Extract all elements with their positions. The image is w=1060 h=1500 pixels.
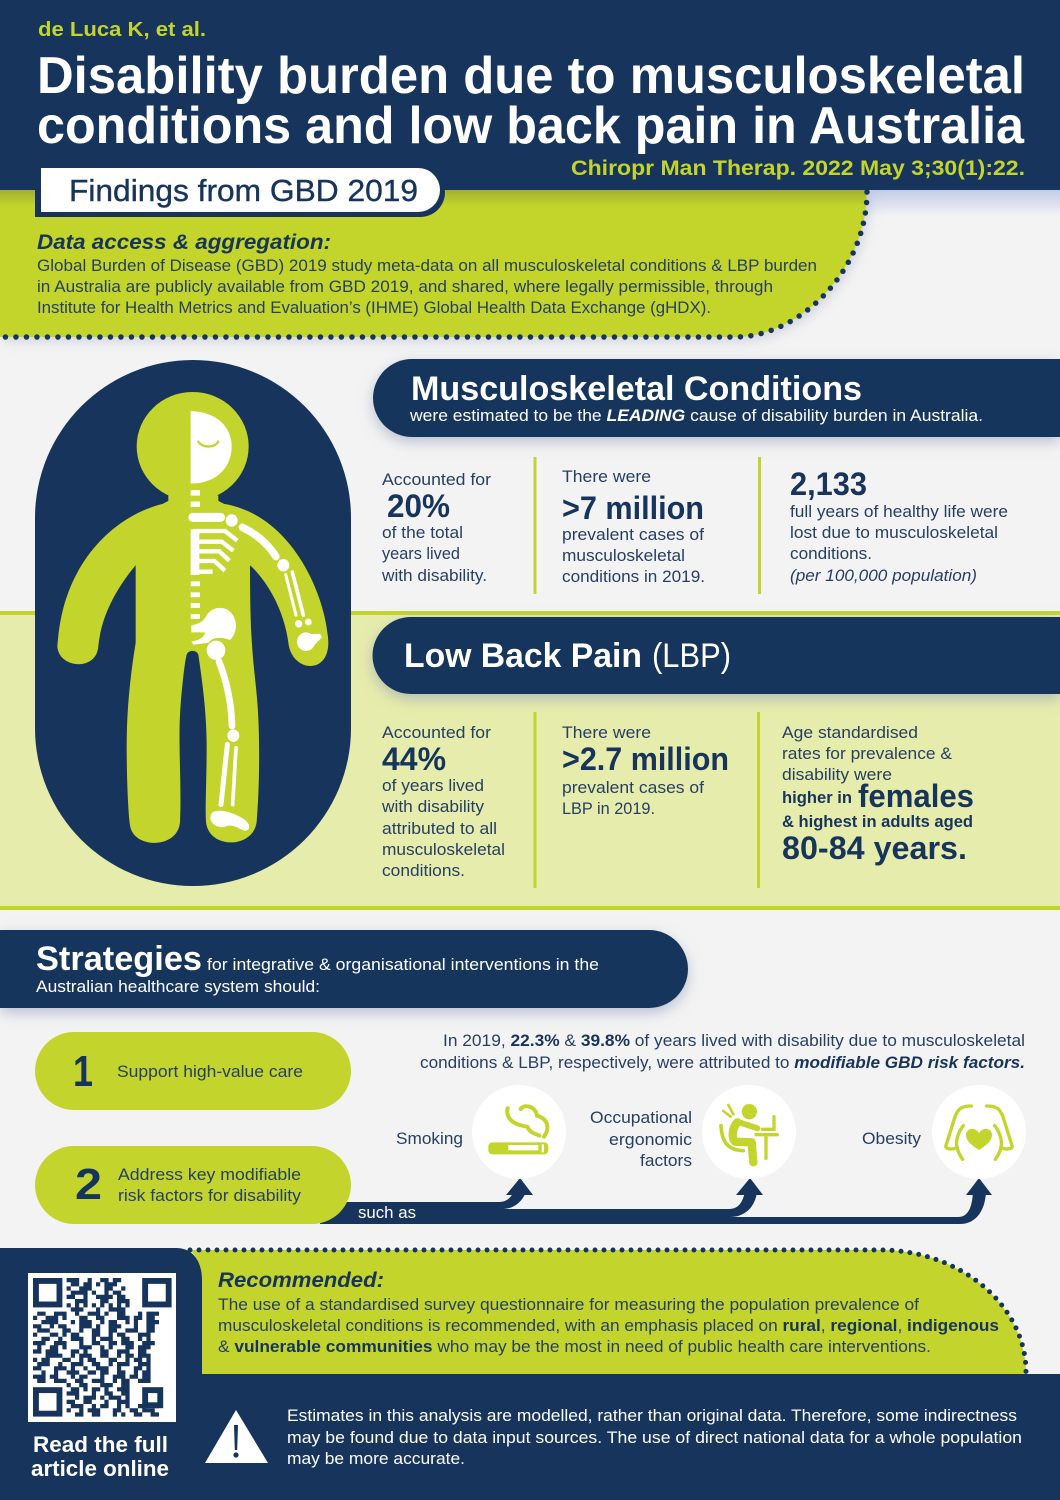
strategy 1: 1 <box>73 1047 93 1096</box>
stat: 7 million: prevalent cases of <box>562 525 704 544</box>
stat: 2,133 years: conditions. <box>790 544 872 563</box>
stat: age standardised rates: Age standardised <box>782 723 918 742</box>
stat: 7 million <box>562 467 705 586</box>
strategy 2: Address key modifiable <box>118 1165 301 1184</box>
stat: 20 percent: of the total <box>382 523 463 542</box>
text: recommended body <box>218 1295 999 1356</box>
rib cage <box>191 529 237 575</box>
heading bar: musculoskeletal conditions: Musculoskeletal Conditions <box>411 370 862 408</box>
heading bar: strategies: for integrative & organisational interventions in the <box>207 955 599 974</box>
stat: 2.7 million: prevalent cases of <box>562 778 704 797</box>
stat: 2,133 years: full years of healthy life were <box>790 502 1008 521</box>
stat: 20 percent: years lived <box>382 544 460 563</box>
heading: data access: Data access & aggregation: <box>37 231 331 254</box>
text: data access body: Global Burden of Disease (GBD) 2019 study meta-data on all musculoskeletal conditions & LBP burden <box>37 256 817 275</box>
skeleton bones <box>188 411 322 831</box>
figure body <box>57 495 328 843</box>
read the full article label: article online <box>31 1456 169 1481</box>
title: Disability burden due to musculoskeletal <box>37 47 1025 105</box>
title: conditions and low back pain in Australia <box>37 97 1025 155</box>
title <box>37 47 1025 155</box>
risk factor: obesity <box>862 1085 1026 1179</box>
stat: 44 percent: attributed to all <box>382 819 497 838</box>
stat: 44 percent <box>381 723 505 880</box>
stat: 20 percent: with disability. <box>381 566 487 585</box>
stat: 2.7 million <box>562 723 729 818</box>
stat: age standardised rates: rates for prevalence & <box>782 744 953 763</box>
strategy 1 <box>35 1032 351 1110</box>
stat: 20 percent: 20% <box>387 488 450 524</box>
panel: recommended <box>190 1250 1026 1374</box>
stat: 2.7 million: There were <box>562 723 651 742</box>
stat: 44 percent: conditions. <box>382 861 465 880</box>
strategy 2 <box>35 1146 351 1224</box>
text: caveat: may be more accurate. <box>287 1449 465 1468</box>
stat: age standardised rates: females <box>858 778 974 814</box>
text: data access body: Institute for Health Metrics and Evaluation’s (IHME) Global Health Data Exchange (gHDX). <box>37 298 711 317</box>
strategy 1: Support high-value care <box>117 1062 303 1081</box>
stat: 7 million: musculoskeletal <box>562 546 685 565</box>
stat: 2,133 years: lost due to musculoskeletal <box>790 523 998 542</box>
risk factor: occupational ergonomic factors: Occupational <box>590 1108 692 1127</box>
panel: data access <box>0 190 867 337</box>
risk factor: occupational ergonomic factors: ergonomic <box>609 1130 693 1149</box>
stat: 7 million: >7 million <box>562 490 704 526</box>
citation: Chiropr Man Therap. 2022 May 3;30(1):22. <box>571 157 1025 180</box>
figure head <box>137 392 249 501</box>
stat: 44 percent: musculoskeletal <box>382 840 505 859</box>
stat: age standardised rates: disability were <box>782 765 892 784</box>
heading bar: musculoskeletal conditions <box>373 359 1060 437</box>
heading bar: low back pain <box>372 617 1060 694</box>
stat: 44 percent: with disability <box>381 797 485 816</box>
strategy 2: 2 <box>75 1160 102 1209</box>
text: recommended body: The use of a standardised survey questionnaire for measuring the population prevalence of <box>218 1295 919 1314</box>
heading bar: musculoskeletal conditions: were estimated to be the LEADING cause of disability burden in Australia. <box>409 406 983 425</box>
read the full article label: Read the full <box>33 1432 168 1457</box>
icon: warning triangle <box>205 1410 268 1463</box>
stat: 2.7 million: LBP in 2019. <box>562 799 655 818</box>
risk factor: obesity: Obesity <box>862 1129 922 1148</box>
stat: 7 million: conditions in 2019. <box>562 567 705 586</box>
stat: 2,133 years <box>790 466 1008 585</box>
header band <box>0 0 1060 190</box>
text: data access body: in Australia are publicly available from GBD 2019, and shared, where legally permissible, through <box>37 277 773 296</box>
text: modifiable risk factors: conditions & LBP, respectively, were attributed to modifiable GBD risk factors. <box>420 1053 1025 1072</box>
stat: 20 percent <box>381 470 491 585</box>
stat: age standardised rates: 80-84 years. <box>782 830 967 866</box>
stat: age standardised rates: & highest in adults aged <box>782 812 973 831</box>
risk factor: smoking: Smoking <box>396 1129 463 1148</box>
such as label: such as <box>358 1203 416 1222</box>
read the full article label <box>31 1432 169 1481</box>
risk factor: smoking <box>396 1085 566 1179</box>
text: caveat: may be found due to data input sources. The use of direct national data for a whole population <box>287 1428 1022 1447</box>
heading bar: low back pain: Low Back Pain <box>404 637 642 675</box>
stat: 2.7 million: >2.7 million <box>562 741 729 777</box>
stat: 44 percent: of years lived <box>382 776 484 795</box>
stat: 7 million: There were <box>562 467 651 486</box>
stat: 44 percent: 44% <box>382 741 446 777</box>
stat: 2,133 years: 2,133 <box>790 466 867 502</box>
findings tab <box>35 168 445 217</box>
footer navy shape <box>0 1248 1060 1500</box>
stat: age standardised rates: higher in <box>782 788 852 807</box>
stat: 44 percent: Accounted for <box>382 723 491 742</box>
QR code <box>28 1273 176 1422</box>
text: modifiable risk factors: In 2019, 22.3% & 39.8% of years lived with disability due to musculoskeletal <box>443 1031 1025 1050</box>
heading bar: strategies: Strategies <box>36 940 202 978</box>
stat: age standardised rates <box>782 723 974 866</box>
risk factor: occupational ergonomic factors: factors <box>640 1151 692 1170</box>
findings tab: Findings from GBD 2019 <box>69 173 418 208</box>
pale green LBP band <box>0 611 1060 910</box>
risk factor: occupational ergonomic factors <box>590 1085 796 1179</box>
heading bar: strategies: Australian healthcare system should: <box>36 977 320 996</box>
text: caveat: Estimates in this analysis are modelled, rather than original data. Therefore, some indirectness <box>287 1406 1017 1425</box>
risk factor arrows <box>320 1178 992 1224</box>
text: data access body <box>37 256 817 317</box>
text: recommended body: & vulnerable communities who may be the most in need of public health care interventions. <box>218 1337 931 1356</box>
strategy 2: risk factors for disability <box>118 1186 302 1205</box>
heading bar: low back pain: (LBP) <box>652 637 731 675</box>
stat: 2,133 years: (per 100,000 population) <box>790 566 977 585</box>
heading bar: strategies <box>0 930 688 1008</box>
header shadow <box>860 190 1060 216</box>
text: recommended body: musculoskeletal conditions is recommended, with an emphasis placed on rural, regional, indigenous <box>218 1316 999 1335</box>
heading: recommended: Recommended: <box>218 1269 384 1292</box>
text: caveat <box>287 1406 1022 1468</box>
stat: 20 percent: Accounted for <box>382 470 491 489</box>
text: modifiable risk factors <box>420 1031 1025 1072</box>
panel: skeleton figure <box>35 360 351 886</box>
authors: de Luca K, et al. <box>38 19 206 41</box>
